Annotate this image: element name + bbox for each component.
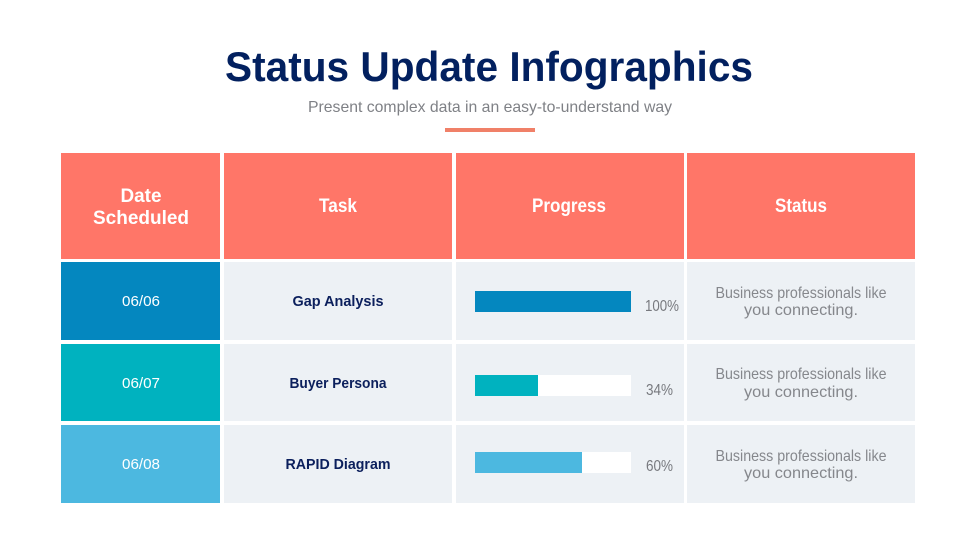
status cell: Business professionals like: [716, 448, 887, 465]
status cell: Business professionals like: [716, 285, 887, 302]
task cell: RAPID Diagram: [286, 456, 390, 473]
progress cell 34%: 34%: [646, 382, 673, 399]
accent underline: [445, 128, 535, 132]
status cell: you connecting.: [744, 465, 858, 482]
status cell: you connecting.: [744, 384, 858, 401]
progress cell 100%: [456, 262, 684, 340]
header: task: [224, 153, 452, 259]
task cell: [224, 344, 452, 421]
status cell: Business professionals like: [716, 366, 887, 383]
date cell 06/07: [61, 344, 220, 421]
progress cell 34%: [456, 344, 684, 421]
status cell: you connecting.: [744, 302, 858, 319]
header: date scheduled: Scheduled: [93, 208, 189, 229]
task cell: Buyer Persona: [290, 375, 387, 392]
header: progress: [456, 153, 684, 259]
header: date scheduled: Date: [120, 186, 162, 207]
header: task: Task: [319, 196, 357, 217]
progress cell 60%: 60%: [646, 458, 673, 475]
date cell 06/06: 06/06: [122, 293, 160, 310]
subtitle: Present complex data in an easy-to-understand way: [308, 99, 672, 116]
progress cell 100%: 100%: [645, 298, 679, 315]
date cell 06/08: 06/08: [122, 456, 160, 473]
task cell: [224, 262, 452, 340]
progress cell 60%: [456, 425, 684, 503]
table header row: [61, 153, 915, 259]
header: progress: Progress: [532, 196, 606, 217]
status cell: [687, 344, 915, 421]
status cell: [687, 425, 915, 503]
row: gap analysis: [61, 262, 915, 340]
date cell 06/07: 06/07: [122, 375, 160, 392]
date cell 06/08: [61, 425, 220, 503]
header: date scheduled: [61, 153, 220, 259]
date cell 06/06: [61, 262, 220, 340]
header: status: Status: [775, 196, 827, 217]
task cell: [224, 425, 452, 503]
task cell: Gap Analysis: [292, 293, 384, 310]
header: status: [687, 153, 915, 259]
row: rapid diagram: [61, 425, 915, 503]
title: Status Update Infographics: [225, 43, 753, 90]
status cell: [687, 262, 915, 340]
row: buyer persona: [61, 344, 915, 421]
